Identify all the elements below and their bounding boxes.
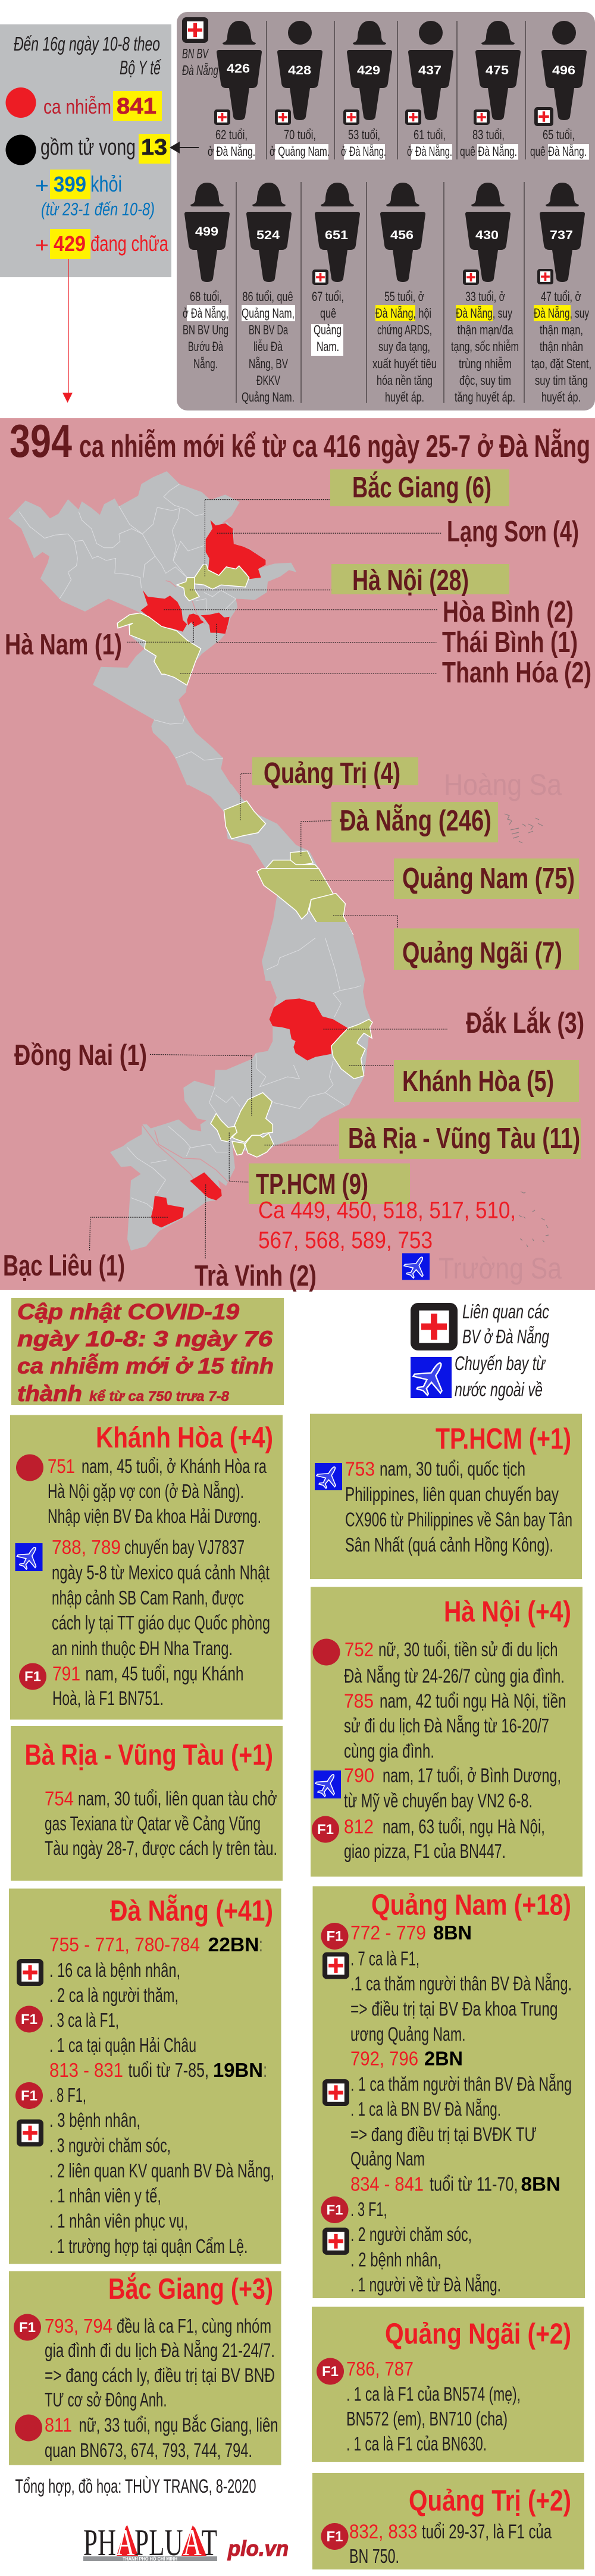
- patient 475: 83 tuổi,: [472, 127, 505, 142]
- patient 524: 524: [256, 228, 280, 242]
- patient 430: tăng huyết áp.: [455, 390, 515, 405]
- case 753: nam, 30 tuổi, quốc tịch: [380, 1458, 525, 1480]
- label: Đà Nẵng: Đà Nẵng (246): [340, 804, 491, 837]
- panel: Đà Nẵng: [9, 1888, 281, 2264]
- patient 499: ở Đà Nẵng,: [183, 306, 228, 321]
- cases 834-841: . 2 người chăm sóc,: [350, 2223, 472, 2245]
- case 811: 811: [45, 2414, 72, 2436]
- patient 428: [270, 21, 330, 159]
- stat: recovered 399: khỏi: [90, 172, 122, 196]
- case 754: Tàu ngày 28-7, được cách ly trên tàu.: [45, 1837, 277, 1859]
- stat: recovered 399: (từ 23-1 đến 10-8): [41, 199, 155, 220]
- case 751: [16, 1454, 267, 1527]
- text: update time: [14, 33, 162, 79]
- label: Đà Nẵng: [331, 802, 498, 842]
- case 812: [312, 1816, 545, 1862]
- label: Bắc Giang: [330, 469, 509, 506]
- stat: recovered 399: +: [35, 173, 49, 198]
- cases 834-841: 8BN: [521, 2173, 560, 2195]
- cases 755-784: . 2 ca là người thăm,: [49, 1984, 178, 2006]
- label: Hoàng Sa: Hoàng Sa: [444, 768, 562, 801]
- cases 772-779: ương Quảng Nam.: [350, 2023, 465, 2045]
- panel: Quảng Nam: [313, 1886, 585, 2298]
- stat: under treatment 429: đang chữa: [90, 231, 168, 256]
- patient 426: ở Đà Nẵng.: [208, 144, 255, 159]
- text: TP.HCM case numbers: Ca 449, 450, 518, 517, 510,: [258, 1197, 516, 1223]
- patient 426: 426: [227, 62, 250, 76]
- stat: total infected 841: ca nhiễm: [43, 96, 111, 118]
- patient 651: 651: [325, 228, 348, 242]
- case 788, 789: [14, 1536, 270, 1659]
- cases 834-841: . 2 bệnh nhân,: [350, 2249, 441, 2270]
- cases 793, 794: đều là ca F1, cùng nhóm: [117, 2315, 271, 2337]
- south provinces: [110, 922, 372, 1251]
- cases 813-831: . 3 người chăm sóc,: [49, 2135, 171, 2156]
- patient 651: quê: [320, 306, 336, 321]
- cases 834-841: F1: [326, 2202, 343, 2218]
- heading: Khánh Hòa (+4): [96, 1422, 273, 1454]
- patient 475: [460, 21, 521, 159]
- label: Quảng Ngãi: [394, 928, 579, 970]
- case 788, 789: an ninh thuộc ĐH Nha Trang.: [52, 1637, 233, 1659]
- panel: national totals: [0, 24, 171, 277]
- north provinces: [8, 471, 296, 785]
- patient 428: 70 tuổi,: [284, 127, 316, 142]
- stat: under treatment 429: 429: [54, 231, 86, 256]
- patient 429: 429: [357, 64, 380, 77]
- cases 786, 787: . 1 ca là F1 của BN574 (mẹ),: [346, 2383, 521, 2405]
- patient 651: Nam.: [317, 339, 339, 354]
- icon: hospital legend: [182, 17, 218, 78]
- case 788, 789: nhập cảnh SB Cam Ranh, được: [52, 1587, 244, 1609]
- case 811: [15, 2414, 278, 2461]
- patient 456: chứng ARDS,: [377, 322, 432, 337]
- case 754: [45, 1787, 277, 1859]
- cases 813-831: . 1 nhân viên phục vụ,: [49, 2210, 188, 2232]
- icon: plane: [401, 1252, 431, 1281]
- cases 834-841: . 1 người về từ Đà Nẵng.: [350, 2274, 501, 2295]
- case 811: quan BN673, 674, 793, 744, 794.: [45, 2439, 252, 2461]
- patient 456: hóa nền tăng: [377, 373, 433, 388]
- case 751: Hà Nội gặp vợ con (ở Đà Nẵng).: [48, 1480, 244, 1502]
- case 812: 812: [344, 1816, 374, 1837]
- patient 430: độc, suy tim: [459, 373, 511, 388]
- panel: Bắc Giang: [9, 2271, 281, 2465]
- panel: TP.HCM: [310, 1414, 582, 1579]
- case 788, 789: 788, 789: [52, 1536, 121, 1558]
- patient 737: 737: [550, 228, 573, 242]
- patient 737: huyết áp.: [541, 390, 581, 405]
- label: Hoàng Sa: [444, 768, 562, 843]
- row dividers: [236, 21, 525, 403]
- panel: update heading: ca nhiễm mới ở 15 tỉnh: [17, 1354, 274, 1378]
- panel: Quảng Trị: [312, 2473, 584, 2569]
- panel: update heading: thành: [17, 1381, 82, 1406]
- legend: plane icon: nước ngoài về: [455, 1378, 543, 1400]
- cases 793, 794: [14, 2314, 275, 2411]
- patient 437: [405, 21, 453, 159]
- stat: deaths 13: gồm tử vong: [40, 135, 136, 160]
- cases 813-831: . 3 bệnh nhân,: [49, 2109, 140, 2131]
- cases 832, 833: BN 750.: [349, 2545, 399, 2567]
- text: update time: Đến 16g ngày 10-8 theo: [14, 33, 160, 55]
- cases 755-784: 22BN: [208, 1933, 259, 1955]
- case 753: [314, 1458, 572, 1556]
- case 791: [19, 1662, 244, 1709]
- case 812: F1: [317, 1822, 334, 1838]
- cases 813-831: F1: [21, 2088, 37, 2104]
- stat: total infected 841: 841: [117, 94, 156, 119]
- case 785: [344, 1690, 566, 1762]
- cases 793, 794: TƯ cơ sở Đông Anh.: [45, 2389, 167, 2411]
- credit: Tổng hợp, đồ họa: THÙY TRANG, 8-2020: [15, 2475, 256, 2497]
- case 788, 789: cách ly tại TT giáo dục Quốc phòng: [52, 1612, 270, 1634]
- patient 499: Bướu Đà: [188, 339, 223, 354]
- case 811: nữ, 33 tuổi, ngụ Bắc Giang, liên: [79, 2414, 278, 2436]
- case 791: Hoà, là F1 BN751.: [52, 1687, 164, 1709]
- case 754: gas Texiana từ Qatar về Cảng Vũng: [45, 1812, 261, 1835]
- stat: under treatment 429: [35, 229, 168, 259]
- cases 786, 787: BN572 (em), BN710 (cha): [346, 2408, 508, 2430]
- cases 832, 833: [321, 2520, 552, 2567]
- patient 426: [208, 21, 262, 159]
- cases 793, 794: => đang cách ly, điều trị tại BV BNĐ: [45, 2364, 275, 2386]
- legend: plane icon: Chuyến bay từ: [455, 1352, 546, 1374]
- cases 793, 794: 793, 794: [45, 2315, 112, 2337]
- patient 456: Đà Nẵng, hội: [375, 306, 431, 321]
- patient 496: 65 tuổi,: [543, 127, 575, 142]
- cases 832, 833: F1: [326, 2528, 343, 2545]
- label: Hà Nam: Hà Nam (1): [5, 629, 122, 661]
- logo: Pháp Luật: [83, 2521, 289, 2564]
- stat: deaths 13: 13: [141, 135, 167, 160]
- patient 524: Quảng Nam.: [242, 390, 295, 405]
- patient 430: 33 tuổi, ở: [465, 289, 505, 304]
- cases 813-831: . 2 liên quan KV quanh BV Đà Nẵng,: [49, 2160, 274, 2182]
- patient 524: [242, 183, 295, 405]
- heading: Đà Nẵng (+41): [110, 1894, 273, 1928]
- patient 430: trùng nhiễm: [459, 356, 512, 371]
- patient 499: 499: [195, 225, 218, 239]
- text: update time: Bộ Y tế: [120, 57, 162, 79]
- patient 437: 437: [418, 64, 441, 77]
- case 788, 789: ngày 5-8 từ Mexico quá cảnh Nhật: [52, 1561, 270, 1584]
- label: Trà Vinh: Trà Vinh (2): [195, 1260, 317, 1292]
- map: Vietnam provinces: [8, 471, 372, 1251]
- cases 834-841: tuổi từ 11-70,: [430, 2173, 518, 2195]
- case 752: 752: [345, 1638, 374, 1660]
- cases 755-784: 755 - 771, 780-784: [49, 1933, 200, 1955]
- cases 813-831: . 1 nhân viên y tế,: [49, 2185, 161, 2207]
- panel: update heading: ngày 10-8: 3 ngày 76: [17, 1327, 273, 1351]
- legend: hospital icon: [411, 1300, 549, 1350]
- patient 524: Quảng Nam,: [242, 306, 295, 321]
- cases 792, 796: 792, 796: [350, 2048, 418, 2069]
- patient 456: 456: [390, 228, 414, 242]
- cases 772-779: F1: [326, 1929, 343, 1944]
- legend: plane icon: [408, 1352, 546, 1400]
- patient 651: [311, 183, 360, 356]
- patient 496: 496: [552, 64, 575, 77]
- cases 772-779: [321, 1922, 572, 2045]
- cases 813-831: . 1 trường hợp tại quận Cẩm Lệ.: [49, 2235, 248, 2257]
- case 791: F1: [24, 1669, 41, 1685]
- cases 834-841: [321, 2173, 560, 2295]
- stat: recovered 399: 399: [54, 172, 86, 196]
- legend: hospital icon: BV ở Đà Nẵng: [462, 1325, 549, 1347]
- heading: Bắc Giang (+3): [108, 2273, 273, 2305]
- case 812: giao pizza, F1 của BN447.: [344, 1840, 506, 1862]
- patient 456: huyết áp.: [385, 390, 424, 405]
- case 751: 751: [48, 1455, 75, 1477]
- panel: update heading: [11, 1298, 284, 1406]
- cases 786, 787: . 1 ca là F1 của BN630.: [346, 2433, 487, 2455]
- panel: 13 deaths list: [177, 12, 595, 410]
- cases 813-831: 19BN: [213, 2059, 263, 2081]
- patient 429: [341, 21, 392, 159]
- icon: hospital legend: BN BV: [182, 46, 209, 61]
- cases 772-779: 772 - 779: [350, 1922, 426, 1944]
- leader lines: [90, 500, 448, 1259]
- label: Bắc Giang: Bắc Giang (6): [352, 471, 491, 504]
- case 790: 790: [344, 1765, 374, 1786]
- patient 437: 61 tuổi,: [414, 127, 446, 142]
- patient 456: xuất huyết tiêu: [372, 356, 437, 371]
- case 791: 791: [52, 1662, 80, 1685]
- cases 786, 787: 786, 787: [346, 2358, 414, 2380]
- label: Đồng Nai: Đồng Nai (1): [14, 1039, 147, 1071]
- text: TP.HCM case numbers: [258, 1197, 516, 1253]
- label: Trường Sa: Trường Sa: [439, 1252, 562, 1285]
- label: Trường Sa: [439, 1192, 562, 1285]
- patient 475: 475: [486, 64, 509, 77]
- patient 430: thận mạn/đa: [457, 322, 513, 337]
- cases 813-831: :: [264, 2059, 267, 2081]
- case 785: 785: [344, 1690, 374, 1712]
- icon: hospital legend: Đà Nẵng: [182, 62, 218, 78]
- cases 755-784: F1: [21, 2011, 37, 2027]
- patient 429: ở Đà Nẵng.: [341, 144, 386, 159]
- cases 772-779: . 7 ca là F1,: [350, 1948, 419, 1969]
- patient 499: BN BV Ung: [183, 322, 228, 337]
- arrow: treatment to map: [62, 259, 73, 403]
- label: Khánh Hòa: Khánh Hòa (5): [402, 1066, 554, 1098]
- patient 428: ở Quảng Nam.: [270, 144, 330, 159]
- case 785: cùng gia đình.: [344, 1740, 434, 1762]
- patient 524: ĐKKV: [256, 373, 280, 388]
- patient 651: 67 tuổi,: [312, 289, 344, 304]
- case 754: 754: [45, 1787, 74, 1810]
- label: TP.HCM: TP.HCM (9): [256, 1168, 368, 1201]
- case 788, 789: chuyến bay VJ7837: [124, 1536, 245, 1558]
- logo: Pháp Luật: plo.vn: [227, 2536, 289, 2561]
- cases 755-784: [15, 1933, 262, 2056]
- panel: Khánh Hòa: [10, 1415, 283, 1719]
- cases 813-831: . 8 F1,: [49, 2084, 86, 2106]
- central provinces: [187, 784, 319, 869]
- case 751: nam, 45 tuổi, ở Khánh Hòa ra: [82, 1455, 267, 1477]
- heading: Bà Rịa - Vũng Tàu (+1): [25, 1740, 273, 1772]
- patient 430: Đà Nẵng, suy: [456, 306, 513, 321]
- patient 430: tạng, sốc nhiễm: [451, 339, 519, 354]
- cases 813-831: tuổi từ 7-85,: [129, 2059, 209, 2081]
- patient 524: Nẵng, BV: [249, 356, 288, 371]
- patient 456: suy đa tạng,: [378, 339, 430, 354]
- cases 793, 794: gia đình đi du lịch Đà Nẵng 21-24/7.: [45, 2339, 275, 2361]
- case 754: nam, 30 tuổi, liên quan tàu chở: [78, 1787, 277, 1810]
- patient 426: 62 tuổi,: [215, 127, 248, 142]
- cases 755-784: :: [259, 1933, 262, 1955]
- cases 792, 796: [322, 2048, 572, 2170]
- title: 394 new cases: [10, 415, 590, 467]
- cases 834-841: . 3 F1,: [350, 2198, 387, 2220]
- stat: deaths 13: [6, 134, 170, 165]
- patient 430: 430: [475, 228, 499, 242]
- cases 772-779: 8BN: [433, 1922, 472, 1944]
- stat: total infected 841: [6, 87, 162, 121]
- legend: hospital icon: Liên quan các: [462, 1300, 549, 1323]
- cases 755-784: . 1 ca tại quận Hải Châu: [49, 2034, 196, 2056]
- patient 429: 53 tuổi,: [348, 127, 380, 142]
- patient 475: quê Đà Nẵng.: [460, 144, 517, 159]
- label: Hà Nội: Hà Nội (28): [352, 565, 469, 597]
- panel: Quảng Ngãi: [312, 2307, 584, 2462]
- case 752: [313, 1638, 565, 1687]
- logo: Pháp Luật: PHÁPLUẬT: [83, 2521, 217, 2564]
- patient 499: Nẵng.: [193, 356, 218, 371]
- patient 428: 428: [288, 64, 311, 77]
- panel: Bà Rịa - Vũng Tàu: [11, 1726, 283, 1881]
- case 790: [312, 1765, 561, 1812]
- patient 524: BN BV Da: [249, 322, 288, 337]
- cases 832, 833: 832, 833: [349, 2520, 418, 2543]
- patient 499: 68 tuổi,: [190, 289, 222, 304]
- cases 786, 787: [317, 2358, 521, 2455]
- panel: Hà Nội: [311, 1587, 583, 1876]
- panel: map of new cases: [0, 415, 595, 1292]
- case 753: 753: [345, 1458, 375, 1480]
- patient 737: [531, 183, 591, 405]
- label: Bạc Liêu: Bạc Liêu (1): [3, 1250, 125, 1282]
- label: Quảng Trị: Quảng Trị (4): [264, 757, 400, 789]
- cases 813-831: [15, 2059, 274, 2257]
- panel: update heading: Cập nhật COVID-19: [17, 1299, 239, 1324]
- cases 792, 796: 2BN: [424, 2048, 463, 2069]
- case 751: Nhập viện BV Đa khoa Hải Dương.: [48, 1505, 261, 1527]
- patient 496: [530, 21, 589, 159]
- cases 792, 796: Quảng Nam: [350, 2148, 425, 2170]
- panel: update heading: kể từ ca 750 trưa 7-8: [89, 1389, 230, 1405]
- arrow: deaths to case list: [170, 142, 199, 153]
- stat: recovered 399: [35, 170, 155, 220]
- patient 524: liễu Đà: [253, 339, 283, 354]
- cases 792, 796: . 1 ca là BN BV Đà Nẵng.: [350, 2098, 501, 2120]
- patient 430: [451, 183, 519, 405]
- cases 793, 794: F1: [19, 2320, 36, 2336]
- patient 651: Quảng: [314, 322, 342, 337]
- cases 755-784: . 3 ca là F1,: [49, 2009, 119, 2031]
- heading: Hà Nội (+4): [444, 1596, 571, 1628]
- patient 437: ở Đà Nẵng.: [407, 144, 452, 159]
- cases 755-784: . 16 ca là bệnh nhân,: [49, 1959, 180, 1981]
- stat: under treatment 429: +: [35, 233, 49, 257]
- cases 834-841: 834 - 841: [350, 2173, 424, 2195]
- logo: Pháp Luật: THÀNH PHỐ HỒ CHÍ MINH: [123, 2556, 177, 2562]
- text: TP.HCM case numbers: 567, 568, 589, 753: [258, 1227, 433, 1253]
- cases 813-831: 813 - 831: [49, 2059, 123, 2081]
- patient 456: [372, 183, 437, 405]
- case 791: nam, 45 tuổi, ngụ Khánh: [86, 1662, 244, 1685]
- label: Khánh Hòa: [394, 1060, 579, 1102]
- patient 499: [183, 183, 230, 371]
- title: 394 new cases: 394: [10, 415, 72, 467]
- cases 786, 787: F1: [322, 2364, 339, 2380]
- patient 456: 55 tuổi, ở: [384, 289, 424, 304]
- patient 524: 86 tuổi, quê: [243, 289, 293, 304]
